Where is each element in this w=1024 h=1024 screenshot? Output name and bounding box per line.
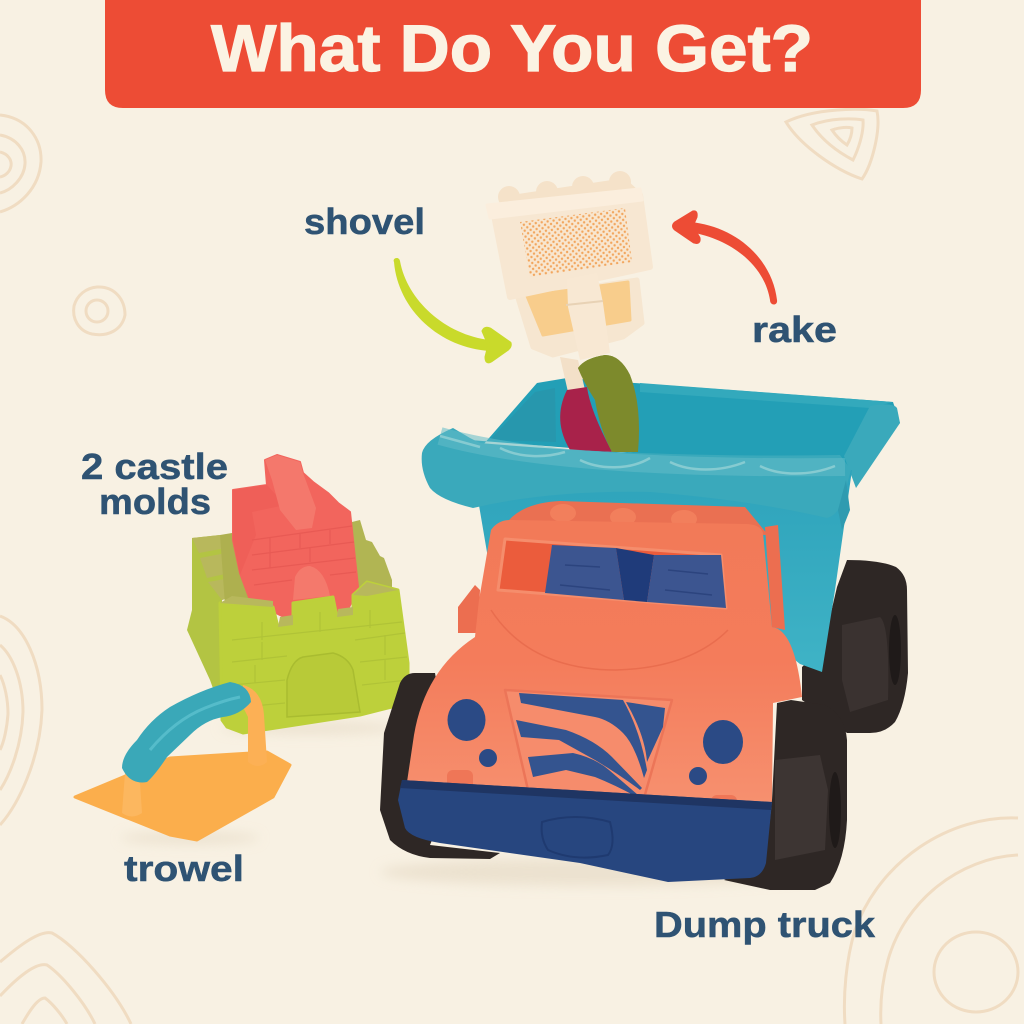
arrow: rake bbox=[674, 212, 777, 304]
cab body bbox=[407, 520, 802, 802]
label: Dump truck: Dump truck bbox=[654, 904, 876, 945]
green handle bbox=[578, 355, 639, 452]
green castle front bbox=[220, 582, 408, 733]
green handle grip overlap bbox=[578, 355, 634, 392]
dump truck front bbox=[380, 501, 847, 890]
rake and shovel heads bbox=[487, 171, 650, 392]
side bump bbox=[458, 585, 480, 633]
handle front bbox=[567, 273, 610, 360]
rake frame bbox=[495, 171, 640, 212]
label: 2 castle molds: 2 castle bbox=[81, 446, 228, 487]
blade bbox=[75, 752, 290, 840]
bumper tabs bbox=[447, 770, 473, 796]
shovel and rake handles behind front lip bbox=[560, 355, 639, 452]
grille slots bbox=[516, 693, 665, 797]
ground shadows bbox=[120, 722, 820, 886]
rake mesh bbox=[520, 208, 632, 277]
title banner bbox=[105, 0, 921, 108]
roof bumps bbox=[550, 504, 697, 528]
castle molds bbox=[187, 455, 408, 733]
grille frame bbox=[505, 690, 672, 812]
label: 2 castle molds: molds bbox=[99, 481, 211, 522]
truck rear wheel bbox=[802, 560, 908, 733]
arrow: shovel bbox=[394, 258, 510, 362]
cab window bbox=[498, 539, 726, 608]
shovel bbox=[518, 280, 642, 355]
mirror post bbox=[765, 525, 785, 630]
label: trowel: trowel bbox=[124, 848, 244, 889]
label: rake: rake bbox=[752, 309, 837, 350]
bumper bbox=[398, 780, 772, 882]
headlights bbox=[448, 699, 486, 741]
roof rear bbox=[500, 501, 768, 535]
green castle left wall bbox=[187, 535, 243, 727]
title banner: What Do You Get? bbox=[211, 11, 813, 85]
left wheel bbox=[380, 673, 500, 859]
handle bbox=[122, 682, 251, 782]
castle door bbox=[287, 653, 360, 717]
green castle back merlons bbox=[350, 520, 392, 600]
maroon handle bbox=[560, 387, 612, 452]
trowel bbox=[75, 682, 290, 840]
dump truck bed bbox=[422, 355, 900, 672]
red castle bbox=[233, 455, 358, 620]
label: shovel: shovel bbox=[304, 201, 425, 242]
back wall and inner floor bbox=[470, 378, 900, 470]
front lip bbox=[422, 428, 851, 518]
right front wheel bbox=[724, 700, 847, 890]
hood crease bbox=[491, 610, 728, 670]
bed side bbox=[473, 470, 852, 672]
